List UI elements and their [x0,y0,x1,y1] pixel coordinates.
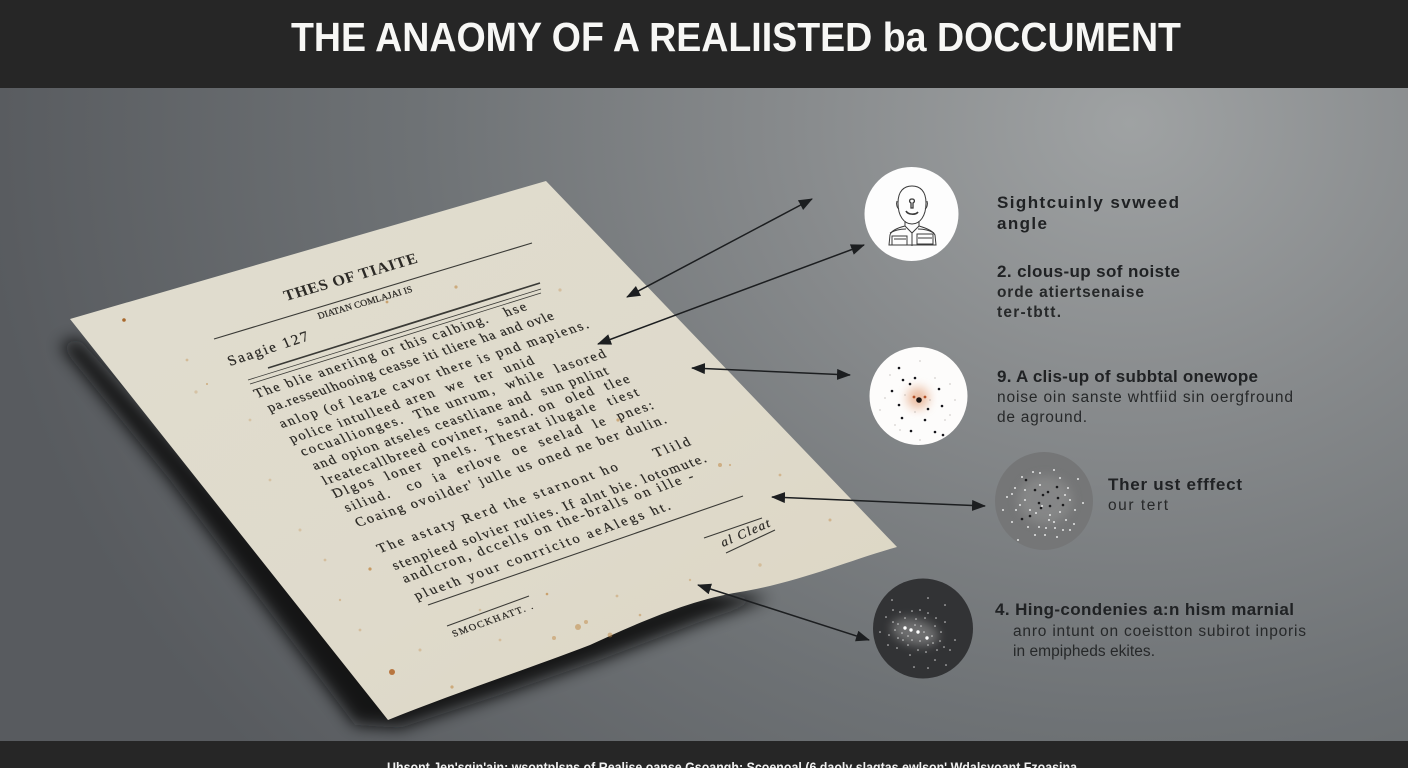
callout 3: subtle noise [997,367,1293,426]
body paragraph one: pa.resseulhooing ceasse iti tliere ha and ovle [264,310,557,415]
arrow: sheet angle [627,199,812,297]
icon: person portrait [864,167,958,261]
icon: subtle noise on white [870,347,968,445]
callout 4: high-contrast marks: anro intunt on coeistton subirot inporis [1013,623,1306,640]
callout 2: close-up of noise [997,262,1180,321]
body paragraph one: The blie aneriing or this calbing. hse [251,300,530,401]
document rules [214,243,775,626]
arrow: subtle noise [692,368,850,375]
icon: rust speckle on gray [995,452,1093,550]
paper drop shadow [60,338,770,728]
icon: bright speckle on dark [873,578,973,678]
title banner [0,0,1408,88]
signature name: SMOCKHATT. . [450,602,535,640]
callout: rust effect: Ther ust efffect [1108,475,1242,494]
callout 1: sheet angle: angle [997,214,1047,233]
document sheet [70,181,897,720]
callout 2: close-up of noise: ter-tbtt. [997,304,1061,321]
document subheading: DIATAN COMLAJAI IS [317,285,414,322]
callout 3: subtle noise: de aground. [997,409,1087,426]
body paragraph one [251,300,670,530]
body paragraph two: stenpieed solvier rulies. If alnt bie. lotomute. [389,452,710,573]
body paragraph one: Dlgos loner pnels. Thesrat ilugale tiest [329,386,642,501]
body paragraph two [374,435,710,603]
callout 2: close-up of noise: orde atiertsenaise [997,284,1144,301]
arrow: close-up of noise [598,245,864,344]
body paragraph one: and opion atseles ceastliane and sun pnlint [309,364,612,473]
arrow: rust effect [772,497,985,506]
signature: al Cleat [718,515,772,550]
document label: Saagie 127 [225,329,312,370]
title: THE ANAOMY OF A REALIISTED ba DOCCUMENT [291,14,1181,60]
body paragraph one: police intulleed aren we ter unid [286,354,537,446]
arrow: high-contrast marks [698,585,869,640]
body paragraph one: cocuallionges. The unrum, while lasored [297,347,609,459]
footer band [0,741,1408,768]
callout 1: sheet angle [997,193,1179,233]
callout 1: sheet angle: Sightcuinly svweed [997,193,1179,212]
body paragraph one: anlop (of leaze cavor there is pnd mapiens. [276,318,592,431]
paper age spots [122,285,831,689]
callout: rust effect: our tert [1108,497,1169,514]
body paragraph two: plueth your conrricito aeAlegs ht. [411,500,674,603]
callout 4: high-contrast marks [995,600,1306,660]
body paragraph two: andlcron, dccells on the-bralls on ille - [399,470,697,586]
body paragraph one: lreatecallbreed coviner, sand. on oled tlee [319,373,633,488]
callout 3: subtle noise: noise oin sanste whtfiid sin oergfround [997,389,1293,406]
callout 4: high-contrast marks: in empipheds ekites. [1013,643,1155,660]
callout 4: high-contrast marks: 4. Hing-condenies a:n hism marnial [995,600,1294,619]
body paragraph one: Coaing ovoilder' julle us oned ne ber dulin. [352,413,670,530]
document heading: THES OF TIAITE [281,250,420,305]
callout 2: close-up of noise: 2. clous-up sof noiste [997,262,1180,281]
callout: rust effect [1108,475,1242,514]
body paragraph two: The astaty Rerd the starnont ho Tlild [374,435,694,556]
body paragraph one: siliud. co ia erlove oe seelad le pnes: [341,399,657,515]
callout 3: subtle noise: 9. A clis-up of subbtal onewope [997,367,1258,386]
